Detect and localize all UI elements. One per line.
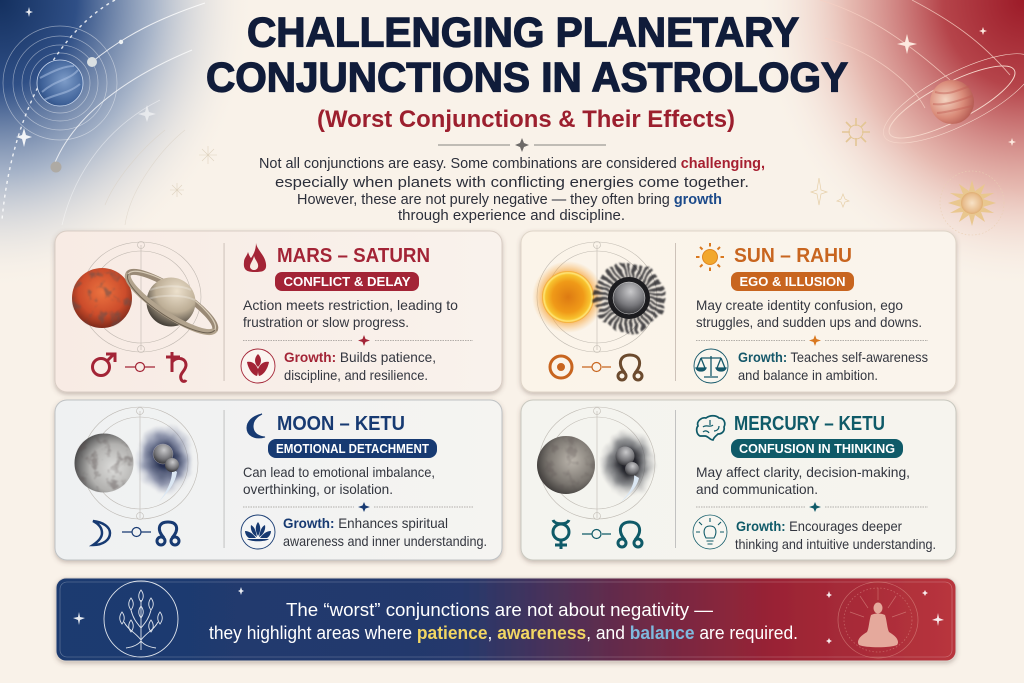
tag: EMOTIONAL DETACHMENT: [276, 442, 429, 456]
intro text: especially when planets with conflicting energies come together.: [275, 174, 749, 191]
symbols: Mercury conjunct Ketu: [553, 520, 642, 549]
intro text: [259, 155, 765, 224]
icon: growth leaf: [241, 349, 275, 383]
divider star: [243, 502, 473, 512]
heading: MERCURY – KETU: [734, 413, 885, 435]
growth text: [738, 349, 928, 383]
body text: [243, 464, 435, 497]
icon: meditating figure: [838, 582, 918, 658]
panel: Mars – Saturn: [55, 231, 502, 392]
body text: May create identity confusion, ego: [696, 297, 903, 313]
icon: sun: [696, 243, 724, 271]
body text: Can lead to emotional imbalance,: [243, 464, 435, 480]
planets: Sun and Rahu illustration: [532, 242, 657, 352]
symbols: Mars conjunct Saturn: [92, 352, 186, 381]
banner text: The “worst” conjunctions are not about negativity —: [286, 600, 713, 620]
decoration: top-right planets, sun and stars: [811, 0, 1024, 235]
panel: Moon – Ketu: [55, 400, 502, 560]
tag: [275, 272, 419, 291]
banner text: they highlight areas where patience, awareness, and balance are required.: [209, 623, 798, 643]
heading: SUN – RAHU: [734, 245, 852, 267]
panel: Mercury – Ketu: [521, 400, 956, 560]
growth text: [284, 349, 436, 383]
icon: brain: [697, 416, 725, 440]
icon: balance scales: [694, 349, 728, 383]
body text: and communication.: [696, 481, 818, 497]
tag: [731, 272, 854, 291]
tag: [731, 439, 903, 458]
growth text: Growth: Teaches self-awareness: [738, 349, 928, 365]
icon: crescent moon: [247, 414, 265, 438]
heading: MOON – KETU: [277, 413, 405, 435]
planets: Mars and Saturn illustration: [72, 242, 223, 352]
panel: Sun – Rahu: [521, 231, 956, 392]
body text: overthinking, or isolation.: [243, 481, 393, 497]
intro text: However, these are not purely negative — they often bring growth: [297, 191, 722, 208]
banner text: [209, 600, 798, 643]
intro text: Not all conjunctions are easy. Some combinations are considered challenging,: [259, 155, 765, 172]
tag: CONFUSION IN THINKING: [739, 442, 895, 456]
body text: [696, 297, 922, 330]
planets: Mercury and Ketu illustration: [537, 407, 657, 520]
divider star: [696, 335, 928, 346]
icon: flame: [244, 243, 266, 272]
divider star: [243, 335, 473, 346]
tag: EGO & ILLUSION: [740, 275, 846, 289]
body text: [243, 297, 458, 330]
tag: CONFLICT & DELAY: [284, 275, 411, 289]
tag: [268, 439, 437, 458]
title: CONJUNCTIONS IN ASTROLOGY: [206, 54, 848, 100]
growth text: thinking and intuitive understanding.: [735, 536, 936, 552]
body text: frustration or slow progress.: [243, 314, 409, 330]
icon: tree of life: [104, 581, 178, 657]
body text: Action meets restriction, leading to: [243, 297, 458, 313]
heading: MARS – SATURN: [277, 245, 430, 267]
title: [206, 8, 848, 100]
body text: [696, 464, 910, 497]
planets: Moon and Ketu illustration: [74, 407, 198, 520]
symbols: Sun conjunct Rahu: [550, 355, 642, 380]
intro text: through experience and discipline.: [398, 207, 625, 224]
symbols: Moon conjunct Ketu: [93, 521, 179, 545]
growth text: Growth: Encourages deeper: [736, 518, 902, 534]
banner: [56, 578, 956, 661]
growth text: [735, 518, 936, 552]
title: CHALLENGING PLANETARY: [247, 8, 799, 56]
icon: lotus: [241, 515, 275, 549]
icon: light bulb: [693, 515, 727, 549]
growth text: and balance in ambition.: [738, 367, 878, 383]
body text: May affect clarity, decision-making,: [696, 464, 910, 480]
growth text: Growth: Builds patience,: [284, 349, 436, 365]
decoration: top-left planets and orbits: [2, 0, 217, 225]
divider star: [696, 502, 928, 512]
growth text: [283, 515, 487, 549]
ornament under subtitle: [438, 138, 606, 152]
growth text: discipline, and resilience.: [284, 367, 428, 383]
subtitle: (Worst Conjunctions & Their Effects): [317, 106, 735, 133]
growth text: Growth: Enhances spiritual: [283, 515, 448, 531]
body text: struggles, and sudden ups and downs.: [696, 314, 922, 330]
banner stars: [73, 587, 944, 644]
growth text: awareness and inner understanding.: [283, 533, 487, 549]
